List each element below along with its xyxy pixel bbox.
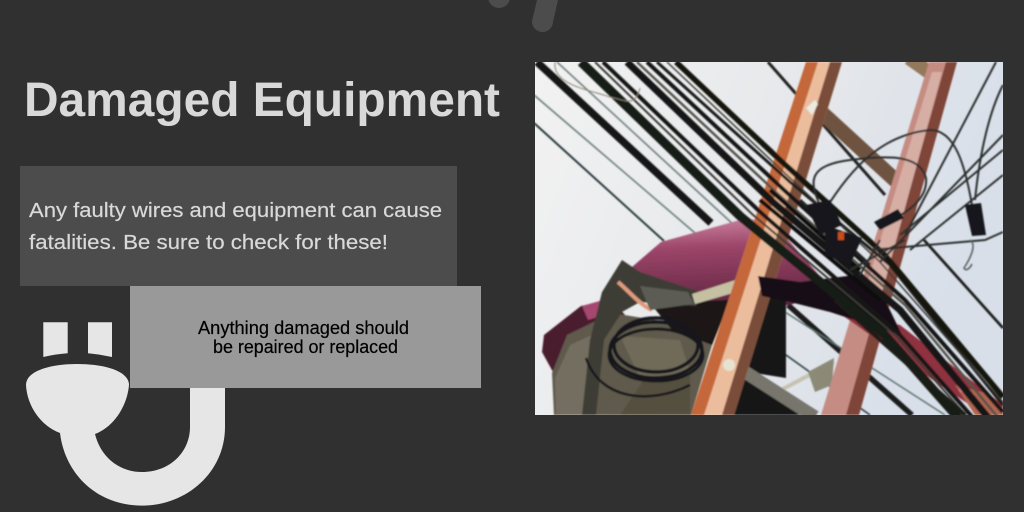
- trousers: [552, 313, 715, 415]
- panel: repair callout: be repaired or replaced: [213, 337, 398, 357]
- wire coil: [586, 318, 703, 396]
- shirt: [632, 218, 819, 306]
- panel: warning text: Any faulty wires and equipment can cause: [29, 199, 442, 222]
- gloved hand: [758, 275, 902, 335]
- panel: repair callout: [130, 286, 481, 388]
- main wire bundles: [537, 62, 1003, 420]
- panel: repair callout: Anything damaged should: [198, 318, 409, 338]
- far ladder rungs: [822, 113, 906, 190]
- icon: plug with cable: [26, 322, 225, 506]
- panel: warning text: fatalities. Be sure to check for these!: [29, 231, 388, 254]
- panel: warning text: [20, 166, 457, 286]
- decorative partial plug at top edge: [488, 0, 558, 32]
- harness belt and straps: [582, 260, 700, 415]
- wire clamps: [806, 200, 986, 265]
- worker leg behind the ladder: [725, 296, 800, 415]
- ladder rail: far: [821, 62, 957, 415]
- title: Damaged Equipment: [24, 74, 500, 127]
- overhead cable loops: [814, 62, 1003, 275]
- near ladder rail: [691, 62, 842, 415]
- thin tan wire loop: [555, 62, 640, 101]
- arm and sleeve: [844, 316, 1003, 408]
- photo: worker on ladder among power lines: [534, 58, 1003, 420]
- background thin wires: [534, 62, 1003, 415]
- dark area under belt: [650, 300, 730, 345]
